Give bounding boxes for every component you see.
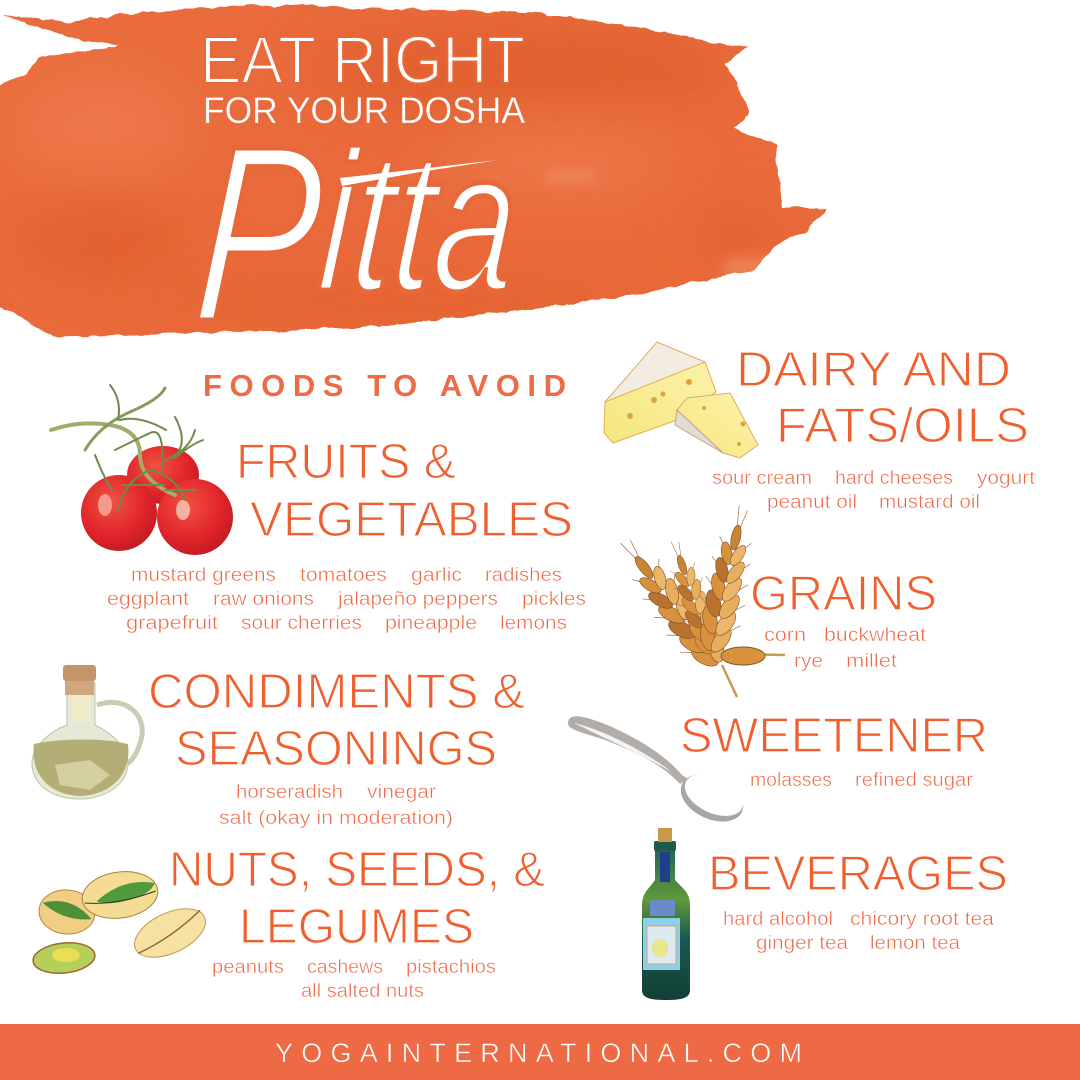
food list: mustard greens bbox=[131, 565, 276, 586]
header banner bbox=[0, 4, 826, 338]
icon: pistachios bbox=[32, 867, 213, 976]
panel: nuts, seeds and legumes bbox=[32, 843, 545, 1002]
heading: fruits and vegetables: FRUITS & bbox=[236, 435, 456, 489]
heading: condiments and seasonings: CONDIMENTS & bbox=[148, 665, 525, 719]
food list: eggplant bbox=[107, 589, 190, 610]
food list: pickles bbox=[522, 589, 586, 610]
icon: oil jar with cork bbox=[32, 665, 142, 799]
script title: Pitta: itta bbox=[313, 110, 525, 333]
food list: lemon tea bbox=[870, 933, 960, 954]
heading: sweetener: SWEETENER bbox=[680, 709, 988, 763]
heading: beverages: BEVERAGES bbox=[708, 847, 1008, 901]
panel: beverages bbox=[642, 828, 1008, 1000]
food list: yogurt bbox=[977, 468, 1036, 489]
food list: pistachios bbox=[406, 957, 496, 978]
food list: millet bbox=[846, 651, 898, 672]
panel: nuts, seeds and legumes: LEGUMES bbox=[239, 900, 474, 954]
subtitle: for your dosha: FOR YOUR DOSHA bbox=[203, 90, 525, 131]
panel: condiments and seasonings: SEASONINGS bbox=[175, 722, 497, 776]
food list: sour cherries bbox=[241, 613, 362, 634]
panel: grains bbox=[605, 501, 937, 697]
food list: buckwheat bbox=[824, 625, 927, 646]
food list: tomatoes bbox=[300, 565, 387, 586]
footer website: YOGAINTERNATIONAL.COM bbox=[275, 1038, 802, 1068]
icon: wine bottle bbox=[642, 828, 690, 1000]
food list bbox=[723, 909, 994, 954]
icon: spoon of sugar bbox=[568, 716, 751, 831]
food list: radishes bbox=[485, 565, 562, 586]
icon: wheat stalks bbox=[605, 501, 785, 697]
panel: dairy and fats/oils: FATS/OILS bbox=[776, 399, 1029, 453]
heading: grains: GRAINS bbox=[750, 567, 937, 621]
title: Eat Right: EAT RIGHT bbox=[200, 23, 525, 98]
panel: dairy and fats/oils bbox=[604, 342, 1036, 513]
food list: jalapeño peppers bbox=[337, 589, 498, 610]
food list bbox=[219, 782, 453, 829]
food list: lemons bbox=[500, 613, 567, 634]
food list bbox=[750, 770, 974, 791]
food list: chicory root tea bbox=[850, 909, 994, 930]
food list: cashews bbox=[307, 957, 383, 978]
food list: vinegar bbox=[367, 782, 437, 803]
food list: garlic bbox=[411, 565, 462, 586]
panel: fruits and vegetables: VEGETABLES bbox=[250, 493, 573, 547]
heading: nuts, seeds and legumes: NUTS, SEEDS, & bbox=[169, 843, 545, 897]
food list: rye bbox=[794, 651, 823, 672]
food list: hard alcohol bbox=[723, 909, 833, 930]
footer bar bbox=[0, 1024, 1080, 1080]
panel: condiments and seasonings bbox=[32, 665, 525, 829]
orange watercolor brush stroke bbox=[0, 0, 840, 345]
script title: Pitta: P bbox=[188, 94, 375, 374]
panel: fruits and vegetables bbox=[51, 385, 586, 634]
food list: pineapple bbox=[385, 613, 477, 634]
food list: refined sugar bbox=[855, 770, 974, 791]
script crossbar bbox=[340, 160, 498, 186]
icon: cheese wedges bbox=[604, 342, 758, 458]
food list: peanut oil bbox=[767, 492, 857, 513]
heading: dairy and fats/oils: DAIRY AND bbox=[736, 343, 1011, 397]
food list: all salted nuts bbox=[301, 981, 424, 1002]
heading: foods to avoid: FOODS TO AVOID bbox=[203, 368, 566, 403]
food list bbox=[712, 468, 1036, 513]
food list: hard cheeses bbox=[835, 468, 953, 489]
food list: sour cream bbox=[712, 468, 812, 489]
food list: mustard oil bbox=[879, 492, 980, 513]
food list: ginger tea bbox=[756, 933, 848, 954]
food list: horseradish bbox=[236, 782, 343, 803]
food list: raw onions bbox=[213, 589, 314, 610]
food list: corn bbox=[764, 625, 806, 646]
food list bbox=[212, 957, 496, 1002]
food list: molasses bbox=[750, 770, 832, 791]
food list bbox=[107, 565, 586, 634]
food list: salt (okay in moderation) bbox=[219, 808, 453, 829]
icon: tomatoes on the vine bbox=[51, 385, 233, 555]
food list: grapefruit bbox=[126, 613, 219, 634]
food list: peanuts bbox=[212, 957, 284, 978]
food list bbox=[764, 625, 927, 672]
panel: sweetener bbox=[568, 709, 988, 831]
